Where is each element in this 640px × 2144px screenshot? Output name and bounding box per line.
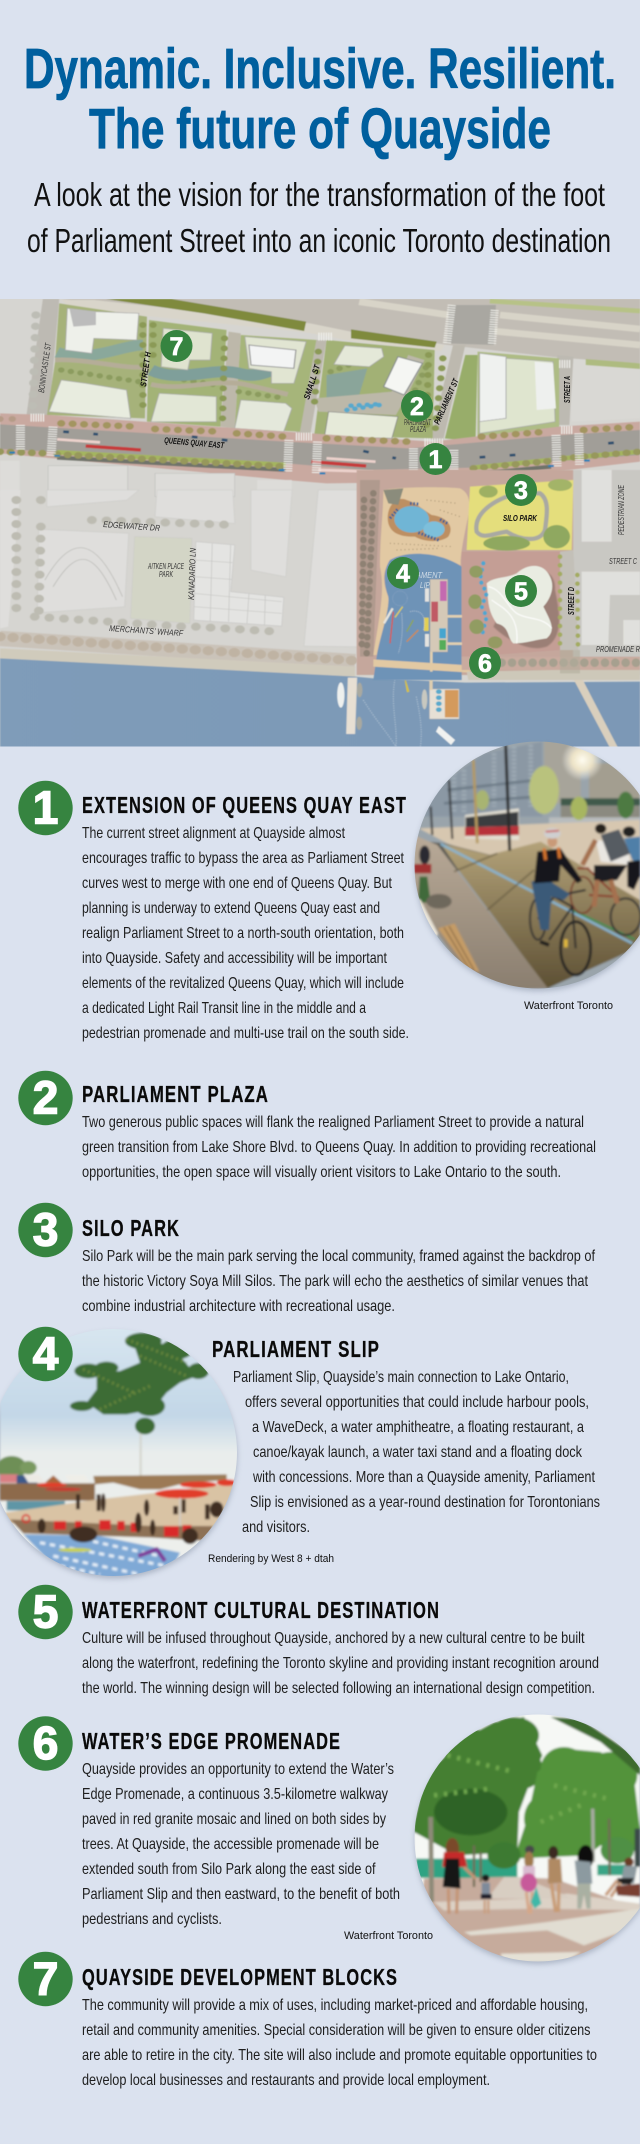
map: street and place labels: AMENT [415, 570, 443, 580]
body text 1: elements of the revitalized Queens Quay, which will include [82, 975, 404, 992]
body text 4: and visitors. [242, 1519, 310, 1536]
title [24, 37, 616, 161]
map: street and place labels: PARK [159, 569, 173, 579]
map: street and place labels: PEDESTRIAN ZONE [616, 485, 626, 535]
map: street and place labels: MERCHANTS’ WHARF [109, 623, 184, 638]
body text 6: Parliament Slip and then eastward, to the benefit of both [82, 1886, 400, 1903]
map: street and place labels: SILO PARK [503, 513, 538, 523]
map: street and place labels: BONNYCASTLE ST [36, 342, 53, 393]
body text 1: encourages traffic to bypass the area as Parliament Street [82, 850, 404, 867]
number badge 2 [18, 1071, 73, 1125]
map: street and place labels: PLAZA [410, 424, 426, 434]
map: street and place labels: STREET H [138, 351, 153, 387]
body text 6: trees. At Quayside, the accessible promenade will be [82, 1836, 379, 1853]
map: street and place labels: EDGEWATER DR [103, 519, 160, 533]
section 1: extension of Queens Quay East [18, 739, 640, 1042]
body text 1: realign Parliament Street to a north-south orientation, both [82, 925, 404, 942]
body text 6 [82, 1761, 400, 1928]
map markers: 5 [514, 578, 528, 606]
site plan map [0, 299, 640, 750]
walkers [446, 1838, 459, 1859]
map: street and place labels: STREET D [566, 587, 576, 615]
body text 7 [82, 1997, 597, 2089]
number badge 4: 4 [33, 1328, 59, 1380]
number badge 7 [18, 1952, 73, 2006]
number badge 3 [18, 1203, 73, 1257]
photo: rendering of harbour pool [0, 1326, 240, 1580]
map: south-west faded blocks and waterfront [0, 490, 640, 750]
body text 1: pedestrian promenade and multi-use trail on the south side. [82, 1025, 409, 1042]
section 2: Parliament Plaza [18, 1071, 596, 1181]
section 4: Parliament Slip [0, 1326, 600, 1580]
section 3: Silo Park [18, 1203, 595, 1315]
body text 4 [233, 1369, 600, 1536]
map: street and place labels: QUEENS QUAY EAST [164, 435, 225, 450]
photo: cyclists on Queens Quay [414, 739, 640, 991]
map markers: 1 [429, 446, 443, 474]
body text 1: curves west to merge with one end of Queens Quay. But [82, 875, 392, 892]
photo credit 4: Rendering by West 8 + dtah [208, 1553, 334, 1565]
body text 3: combine industrial architecture with recreational usage. [82, 1298, 395, 1315]
number badge 2: 2 [33, 1072, 58, 1124]
photo credit 6: Waterfront Toronto [344, 1930, 433, 1942]
body text 6: Edge Promenade, a continuous 3.5-kilometre walkway [82, 1786, 388, 1803]
number badge 5: 5 [33, 1586, 58, 1638]
rider one [561, 922, 591, 975]
body text 6: pedestrians and cyclists. [82, 1911, 222, 1928]
map: street and place labels: LIP [420, 580, 430, 590]
photo credit 1: Waterfront Toronto [524, 1000, 613, 1012]
body text 1: a dedicated Light Rail Transit line in the middle and a [82, 1000, 366, 1017]
heading 1: EXTENSION OF QUEENS QUAY EAST [82, 792, 407, 818]
section 7: Quayside development blocks [18, 1952, 597, 2089]
heading 3: SILO PARK [82, 1215, 180, 1241]
body text 7: develop local businesses and restaurants and provide local employment. [82, 2072, 490, 2089]
number badge 5 [18, 1585, 73, 1639]
map: street and place labels: PARLIAMENT ST [432, 376, 461, 426]
body text 6: paved in red granite mosaic and lined on both sides by [82, 1811, 386, 1828]
map buildings [49, 308, 556, 438]
number badge 6 [18, 1716, 73, 1771]
heading 7: QUAYSIDE DEVELOPMENT BLOCKS [82, 1964, 398, 1990]
rider two [571, 877, 594, 913]
map: Parliament Slip and Silo Park [357, 470, 640, 680]
body text 1 [82, 825, 409, 1042]
map: street and place labels: AITKEN PLACE [147, 561, 184, 571]
heading 6: WATER’S EDGE PROMENADE [82, 1728, 341, 1754]
map markers: 3 [514, 477, 528, 505]
body text 1: The current street alignment at Quayside almost [82, 825, 345, 842]
map markers [160, 330, 537, 679]
map: street and place labels: SMALL ST [301, 363, 322, 401]
body text 2 [82, 1114, 596, 1181]
map markers: 6 [478, 650, 492, 678]
subtitle [27, 176, 611, 259]
map: street and place labels [36, 342, 640, 654]
number badge 4 [18, 1327, 73, 1381]
number badge 1: 1 [33, 782, 58, 834]
map: north half with development blocks [0, 299, 640, 497]
body text 5 [82, 1630, 599, 1697]
section 6: Water's Edge Promenade [18, 1712, 640, 1964]
map: Queens Quay corridor [0, 337, 640, 483]
map: street and place labels: PARLIAMENT [404, 417, 431, 427]
body text 6: Quayside provides an opportunity to extend the Water’s [82, 1761, 394, 1778]
map markers: 4 [396, 560, 410, 588]
heading 4: PARLIAMENT SLIP [212, 1336, 380, 1362]
number badge 1 [18, 781, 73, 835]
number badge 3: 3 [33, 1204, 58, 1256]
body text 1: planning is underway to extend Queens Quay east and [82, 900, 380, 917]
map: street and place labels: STREET A [562, 376, 572, 403]
map markers: 7 [170, 333, 183, 361]
number badge 6: 6 [33, 1717, 58, 1769]
section 5: Waterfront cultural destination [18, 1585, 599, 1697]
body text 6: extended south from Silo Park along the east side of [82, 1861, 376, 1878]
heading 5: WATERFRONT CULTURAL DESTINATION [82, 1597, 440, 1623]
heading 2: PARLIAMENT PLAZA [82, 1081, 269, 1107]
body text 1: into Quayside. Safety and accessibility will be important [82, 950, 387, 967]
number badge 7: 7 [33, 1952, 58, 2004]
photo: tree-lined promenade [414, 1712, 640, 1964]
map markers: 2 [410, 393, 424, 421]
body text 3 [82, 1248, 595, 1315]
map: street and place labels: KANADARIO LN [186, 547, 198, 600]
